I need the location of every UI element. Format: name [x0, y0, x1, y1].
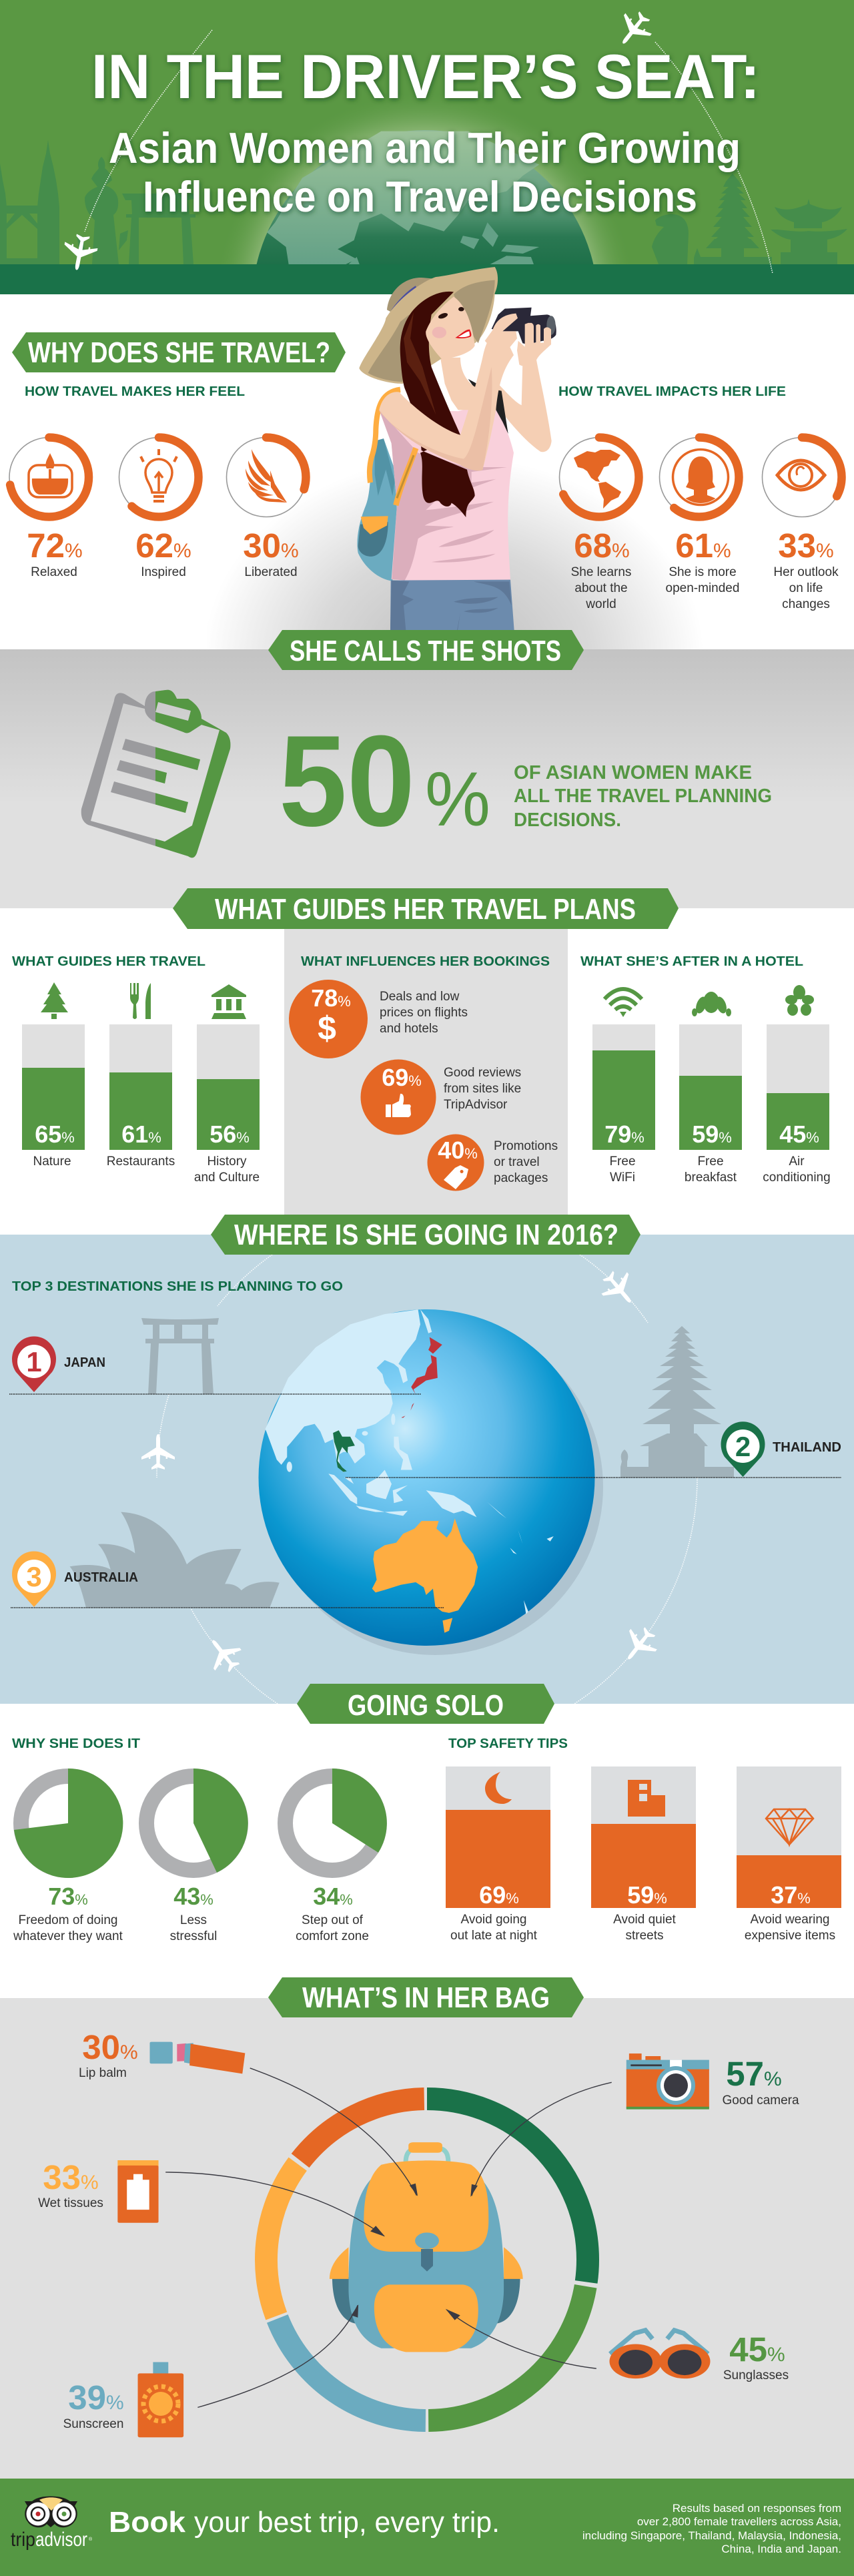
donut: less stressful 43%: 43%: [173, 1883, 214, 1910]
bubble: deals 78%: and hotels: [380, 1022, 438, 1036]
banner: what's in her bag: WHAT’S IN HER BAG: [302, 1981, 550, 2014]
pin: japan: [12, 1336, 105, 1392]
safety bar: late at night 69%: Avoid going: [461, 1913, 526, 1927]
stat ring: relaxed 72%: 72%: [27, 527, 83, 565]
icon: clipboard: [81, 690, 230, 858]
bar: restaurants 61%: 61%: [121, 1120, 161, 1148]
stat ring: relaxed 72%: Relaxed: [31, 565, 77, 579]
item: sunscreen 39%: 39%: [68, 2378, 124, 2417]
stat ring: more open-minded 61%: 61%: [675, 527, 731, 565]
bar: history and culture 56%: 56%: [209, 1120, 250, 1148]
item: sunglasses 45%: Sunglasses: [723, 2368, 789, 2382]
banner: what guides her travel plans: [173, 888, 679, 929]
item: sunglasses 45%: 45%: [729, 2330, 785, 2368]
stat ring: liberated 30%: Liberated: [244, 565, 298, 579]
survey note: Results based on responses from: [673, 2502, 841, 2515]
bar: free wifi 79%: WiFi: [610, 1171, 635, 1185]
donut: comfort zone 34%: [286, 1768, 387, 1943]
donut: freedom 73%: [13, 1768, 123, 1943]
bubble: promotions 40%: or travel: [494, 1155, 540, 1169]
bubble: promotions 40%: Promotions: [494, 1139, 558, 1153]
bag ring chart: [201, 2034, 653, 2485]
banner: why does she travel: WHY DOES SHE TRAVEL?: [28, 336, 330, 369]
safety bar: late at night 69%: 69%: [479, 1881, 519, 1909]
camera lens: [657, 2066, 695, 2105]
bar: air conditioning 45%: conditioning: [763, 1171, 831, 1185]
stat ring: inspired 62%: [119, 438, 199, 579]
safety bar: quiet streets 59%: streets: [625, 1929, 664, 1943]
safety bar: expensive items 37%: [737, 1766, 841, 1943]
donut: less stressful 43%: [147, 1768, 248, 1943]
bar: air conditioning 45%: Air: [789, 1155, 805, 1169]
icon: wifi: [604, 989, 642, 1017]
bar: free breakfast 59%: 59%: [692, 1120, 732, 1148]
skyline silhouettes left: [0, 140, 195, 264]
bar: nature 65%: Nature: [33, 1155, 71, 1169]
japan: [401, 1337, 442, 1417]
stat ring: learns about the world 68%: [559, 438, 639, 611]
heading: why she does it: WHY SHE DOES IT: [12, 1736, 140, 1751]
item: lip balm 30%: 30%: [82, 2028, 138, 2066]
banner: why does she travel: [12, 332, 346, 372]
title: [91, 41, 760, 221]
stat ring: learns about the world 68%: She learns: [571, 565, 631, 579]
header panel: [0, 0, 854, 294]
stat ring: outlook on life changes 33%: 33%: [778, 527, 834, 565]
big stat: 50%: 50: [279, 709, 415, 854]
stat ring: more open-minded 61%: She is more: [669, 565, 737, 579]
bubble: reviews 69%: 69%: [382, 1064, 422, 1091]
heading: what guides her travel: WHAT GUIDES HER TRAVEL: [12, 954, 205, 969]
survey note: [582, 2502, 841, 2555]
flight path around globe: [157, 1255, 697, 1704]
tagline: Book: [109, 2506, 186, 2539]
item: wet tissues 33%: 33%: [43, 2158, 99, 2196]
australia: [372, 1518, 478, 1633]
stat ring: liberated 30%: 30%: [243, 527, 299, 565]
bubble: reviews 69%: TripAdvisor: [444, 1098, 508, 1112]
globe: [256, 130, 594, 264]
banner: she calls the shots: [268, 630, 584, 670]
safety bar: quiet streets 59%: [591, 1766, 696, 1943]
stat ring: liberated 30%: [227, 438, 306, 579]
bar: nature 65%: [22, 982, 85, 1169]
item: sunscreen 39%: Sunscreen: [63, 2417, 123, 2431]
heading: how travel impacts her life: HOW TRAVEL IMPACTS HER LIFE: [558, 384, 786, 399]
icon: moon: [485, 1772, 512, 1804]
logo: tripadvisor owl: advisor: [35, 2529, 87, 2551]
safety bar: late at night 69%: [446, 1766, 550, 1943]
safety bar: expensive items 37%: 37%: [771, 1881, 811, 1909]
stat ring: learns about the world 68%: 68%: [574, 527, 630, 565]
donut: comfort zone 34%: 34%: [313, 1883, 353, 1910]
logo: tripadvisor owl: [11, 2496, 93, 2551]
banner: she calls the shots: SHE CALLS THE SHOTS: [290, 635, 561, 667]
stat ring: outlook on life changes 33%: [762, 438, 842, 611]
landmark: torii gate: [141, 1318, 219, 1394]
icon: sun: [143, 2386, 178, 2421]
icon: tree: [41, 982, 68, 1019]
thailand: [333, 1430, 355, 1472]
icon: fork and knife: [130, 983, 151, 1019]
callout text: of asian women: OF ASIAN WOMEN MAKE: [514, 762, 752, 783]
donut: comfort zone 34%: comfort zone: [296, 1929, 369, 1943]
bubble: promotions 40%: [427, 1135, 558, 1191]
bar: nature 65%: 65%: [35, 1120, 75, 1148]
landmark: balinese pagoda: [620, 1326, 734, 1478]
bar: air conditioning 45%: [763, 985, 831, 1185]
title: Influence on Travel Decisions: [143, 172, 697, 221]
heading: what she's after in a hotel: WHAT SHE’S AFTER IN A HOTEL: [580, 954, 803, 969]
landmark: sydney opera house: [69, 1512, 280, 1608]
icon: candle: [29, 453, 72, 497]
icon: wing: [246, 449, 287, 503]
bubble: reviews 69%: [360, 1060, 521, 1135]
pin: japan: JAPAN: [64, 1355, 105, 1370]
banner: what guides her travel plans: WHAT GUIDES HER TRAVEL PLANS: [215, 893, 636, 926]
islands: [328, 1309, 554, 1614]
bubble: deals 78%: prices on flights: [380, 1006, 468, 1020]
pin: australia: 3: [26, 1561, 42, 1592]
bubble: deals 78%: $: [318, 1010, 336, 1047]
item: sunscreen 39%: [63, 2362, 183, 2437]
heading: what influences her bookings: WHAT INFLUENCES HER BOOKINGS: [301, 954, 550, 969]
item: sunglasses 45%: [609, 2330, 789, 2382]
bar: free breakfast 59%: [679, 992, 742, 1185]
callout text: of asian women: DECISIONS.: [514, 810, 621, 831]
big stat: 50%: %: [425, 757, 490, 842]
planes around globe: [141, 1265, 663, 1678]
donut: freedom 73%: whatever they want: [13, 1929, 123, 1943]
bubble: deals 78%: [289, 980, 468, 1058]
safety bar: quiet streets 59%: 59%: [627, 1881, 667, 1909]
bar: restaurants 61%: [107, 983, 175, 1169]
stat ring: learns about the world 68%: about the: [574, 581, 628, 595]
bar: air conditioning 45%: 45%: [779, 1120, 819, 1148]
bar: free breakfast 59%: breakfast: [685, 1171, 737, 1185]
donut: freedom 73%: Freedom of doing: [19, 1913, 117, 1927]
asia landmass: [266, 1309, 420, 1472]
heading: how travel makes her feel: HOW TRAVEL MAKES HER FEEL: [25, 384, 245, 399]
icon: croissant: [692, 992, 731, 1016]
bar: restaurants 61%: Restaurants: [107, 1155, 175, 1169]
item: wet tissues 33%: [38, 2158, 159, 2223]
banner: going solo: GOING SOLO: [348, 1689, 504, 1722]
skyline silhouettes right: [652, 174, 847, 264]
item: camera 57%: Good camera: [722, 2094, 799, 2108]
arrows to backpack: [165, 2068, 612, 2407]
bar: history and culture 56%: and Culture: [194, 1171, 260, 1185]
footer panel: [0, 2479, 854, 2576]
logo: tripadvisor owl: ®: [89, 2537, 93, 2542]
bar: history and culture 56%: History: [207, 1155, 247, 1169]
stat ring: outlook on life changes 33%: Her outlook: [773, 565, 839, 579]
icon: fan: [785, 985, 814, 1016]
stat ring: more open-minded 61%: open-minded: [666, 581, 739, 595]
big stat: 50%: [279, 709, 490, 854]
heading: top safety tips: TOP SAFETY TIPS: [448, 1736, 568, 1751]
safety bar: expensive items 37%: expensive items: [745, 1929, 835, 1943]
banner: where is she going in 2016: WHERE IS SHE GOING IN 2016?: [234, 1219, 618, 1251]
safety bar: late at night 69%: out late at night: [450, 1929, 538, 1943]
pin: thailand: 2: [735, 1431, 751, 1462]
icon: americas map: [574, 450, 621, 509]
safety bar: quiet streets 59%: Avoid quiet: [613, 1913, 677, 1927]
bubble: deals 78%: Deals and low: [380, 990, 460, 1004]
bubble: reviews 69%: Good reviews: [444, 1066, 521, 1080]
stat ring: inspired 62%: Inspired: [141, 565, 186, 579]
donut: comfort zone 34%: Step out of: [302, 1913, 364, 1927]
destination lines: [9, 1394, 841, 1608]
illustration: backpack: [330, 2142, 523, 2352]
donut: freedom 73%: 73%: [48, 1883, 88, 1910]
title: IN THE DRIVER’S SEAT:: [91, 41, 760, 111]
icon: light bulb: [141, 449, 177, 501]
icon: thumbs up: [386, 1094, 411, 1117]
stat ring: learns about the world 68%: world: [585, 597, 616, 611]
illustration: woman with camera: [357, 267, 556, 631]
icon: eye: [777, 460, 825, 490]
pin: japan: 1: [26, 1346, 42, 1377]
icon: person: [673, 450, 729, 507]
stat ring: more open-minded 61%: [659, 438, 739, 595]
bubble: deals 78%: 78%: [311, 984, 351, 1012]
item: lip balm 30%: Lip balm: [79, 2066, 127, 2080]
donut: less stressful 43%: Less: [180, 1913, 207, 1927]
globe: [259, 1309, 603, 1655]
bar: free wifi 79%: 79%: [604, 1120, 645, 1148]
bar: free breakfast 59%: Free: [697, 1155, 724, 1169]
pin: australia: AUSTRALIA: [64, 1570, 138, 1585]
item: camera 57%: 57%: [726, 2055, 782, 2093]
stat ring: outlook on life changes 33%: on life: [789, 581, 823, 595]
icon: temple: [211, 984, 246, 1019]
survey note: China, India and Japan.: [721, 2543, 841, 2555]
stat ring: outlook on life changes 33%: changes: [782, 597, 830, 611]
bubble: promotions 40%: packages: [494, 1171, 548, 1185]
item: wet tissues 33%: Wet tissues: [38, 2196, 103, 2210]
bubble: reviews 69%: from sites like: [444, 1082, 521, 1096]
survey note: including Singapore, Thailand, Malaysia, Indonesia,: [582, 2529, 841, 2542]
survey note: over 2,800 female travellers across Asia,: [637, 2515, 841, 2528]
item: camera 57%: [626, 2053, 799, 2110]
logo: tripadvisor owl: trip: [11, 2529, 35, 2551]
banner: going solo: [297, 1684, 554, 1724]
bar: history and culture 56%: [194, 984, 260, 1185]
stat ring: inspired 62%: 62%: [135, 527, 191, 565]
pin: thailand: THAILAND: [773, 1440, 841, 1455]
flight paths and planes: [60, 5, 773, 274]
pin: australia: [12, 1551, 138, 1607]
pin: thailand: [721, 1421, 841, 1477]
stat ring: relaxed 72%: [9, 438, 89, 579]
donut: less stressful 43%: stressful: [170, 1929, 217, 1943]
tagline: your best trip, every trip.: [194, 2506, 500, 2539]
title: Asian Women and Their Growing: [109, 123, 741, 172]
bar: free wifi 79%: Free: [609, 1155, 636, 1169]
item: lip balm 30%: [79, 2028, 245, 2080]
bar: free wifi 79%: [592, 989, 655, 1185]
heading: top 3 destinations: TOP 3 DESTINATIONS SHE IS PLANNING TO GO: [12, 1279, 343, 1294]
callout text: of asian women: ALL THE TRAVEL PLANNING: [514, 785, 772, 807]
icon: building: [628, 1780, 665, 1817]
callout text: of asian women: [514, 762, 772, 831]
safety bar: expensive items 37%: Avoid wearing: [750, 1913, 830, 1927]
icon: price tag: [444, 1165, 468, 1189]
icon: diamond: [766, 1809, 813, 1845]
bubble: promotions 40%: 40%: [438, 1137, 478, 1164]
